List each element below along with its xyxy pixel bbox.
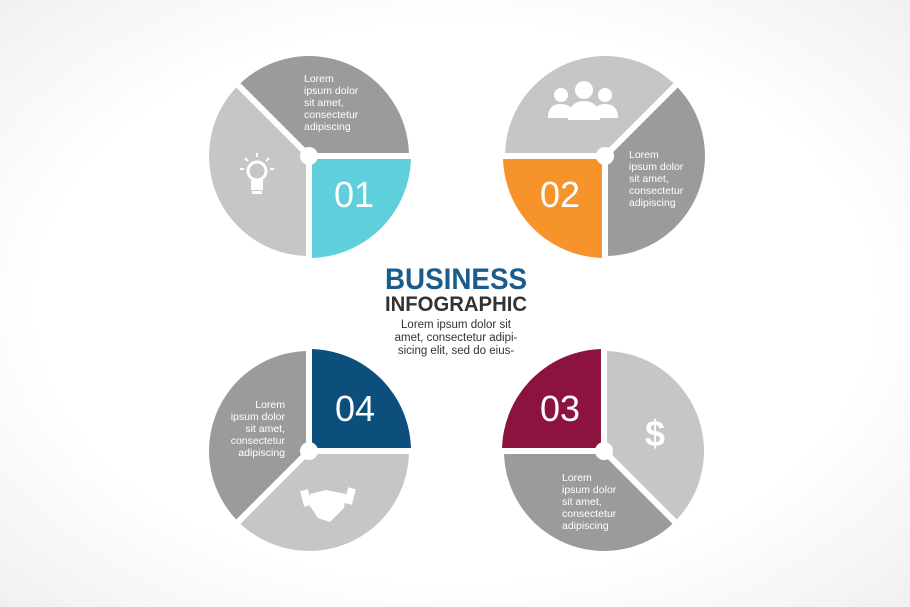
text block 4: consectetur: [231, 435, 286, 447]
circle 3: [494, 340, 704, 551]
text block 2: ipsum dolor: [629, 161, 684, 173]
icon: dollar: $: [645, 413, 665, 454]
text block 4: Lorem: [255, 399, 285, 411]
text block 2: adipiscing: [629, 197, 676, 209]
number 02: 02: [540, 174, 580, 215]
title: BUSINESS: [385, 263, 527, 296]
circle 1: [209, 56, 420, 265]
body text: sicing elit, sed do eius-: [398, 345, 514, 357]
body text: Lorem ipsum dolor sit: [401, 319, 512, 331]
text block 4: sit amet,: [245, 423, 285, 435]
text block 4: ipsum dolor: [231, 411, 285, 423]
text block 3: sit amet,: [562, 496, 602, 508]
text block 3: consectetur: [562, 508, 617, 520]
text block 4: adipiscing: [238, 447, 285, 459]
title: [385, 263, 527, 316]
icon: bulb: [240, 153, 274, 194]
text block 3: ipsum dolor: [562, 484, 617, 496]
text block 1: Lorem: [304, 73, 334, 85]
body text: amet, consectetur adipi-: [395, 332, 518, 344]
icon: people: [548, 81, 618, 120]
text block 1: consectetur: [304, 109, 359, 121]
circle 2: [495, 56, 705, 265]
text block 2: Lorem: [629, 149, 659, 161]
number 04: 04: [335, 388, 375, 429]
text block 2: sit amet,: [629, 173, 669, 185]
text block 1: sit amet,: [304, 97, 344, 109]
number 01: 01: [334, 174, 374, 215]
title: INFOGRAPHIC: [385, 293, 527, 316]
icon: handshake: [300, 487, 356, 522]
text block 1: adipiscing: [304, 121, 351, 133]
number 03: 03: [540, 388, 580, 429]
text block 3: adipiscing: [562, 520, 609, 532]
text block 3: Lorem: [562, 472, 592, 484]
circle 4: [209, 340, 420, 551]
text block 2: consectetur: [629, 185, 684, 197]
text block 1: ipsum dolor: [304, 85, 359, 97]
